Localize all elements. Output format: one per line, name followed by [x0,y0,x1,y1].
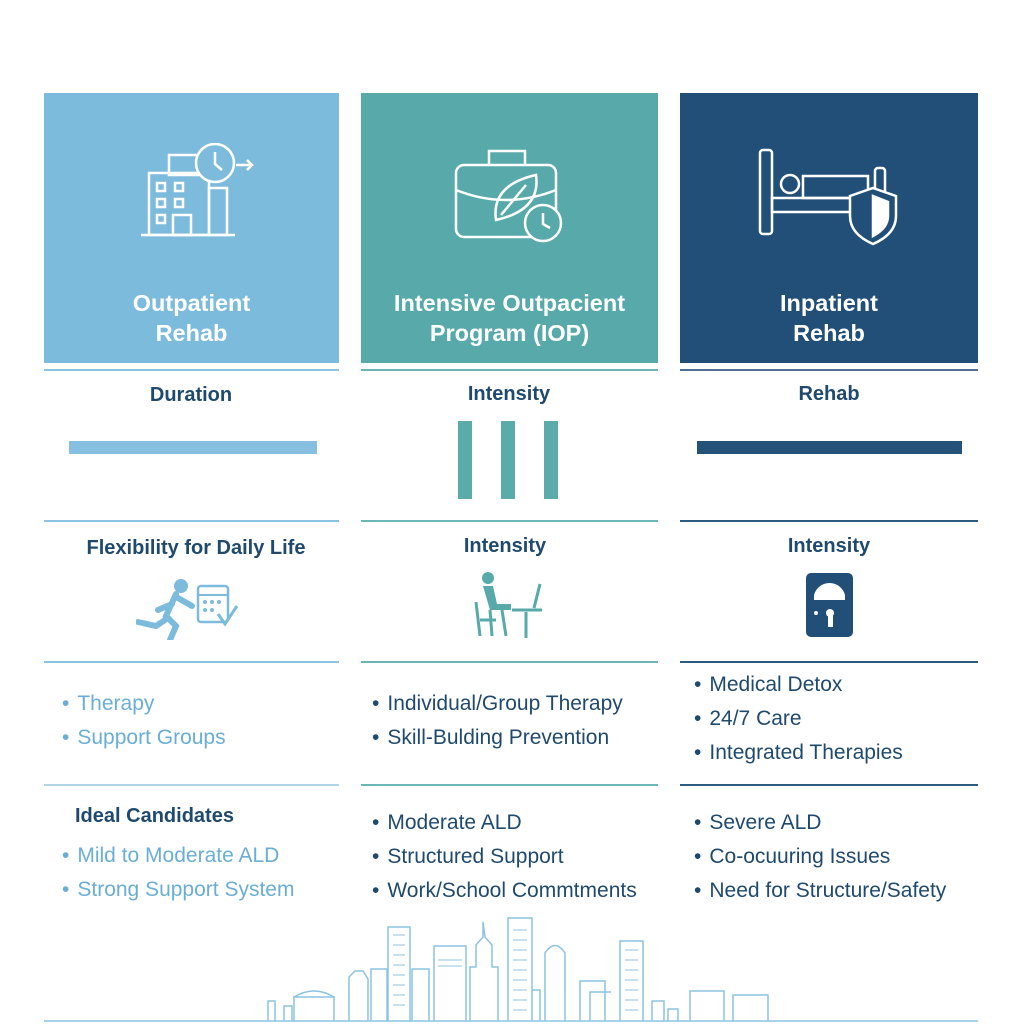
icon: locked door [806,573,853,637]
heading: intensity 2: Intensity [464,535,546,557]
icon: runner with calendar [136,579,238,640]
title: Rehab [156,320,227,346]
list: outpatient services: Therapy [77,692,154,715]
icon: briefcase with leaf and clock [454,150,562,242]
title: Rehab [793,320,865,346]
header: inpatient rehab [680,93,978,363]
heading: duration: Duration [150,384,232,406]
heading: intensity 3: Intensity [788,535,870,557]
bars: intensity [458,421,558,499]
list: inpatient candidates: Co-ocuuring Issues [709,845,890,868]
title [780,290,878,346]
header: outpatient rehab [44,93,339,363]
bar: duration [69,441,317,454]
list: IOP services: Skill-Bulding Prevention [387,726,609,749]
icon: person at desk [474,572,542,638]
list: outpatient services: Support Groups [77,726,226,749]
list: outpatient services [62,692,226,749]
list: outpatient candidates: Strong Support System [77,878,294,901]
bar: rehab [697,441,962,454]
list: inpatient services: Integrated Therapies [709,741,903,764]
list: inpatient candidates: Need for Structure/Safety [709,879,946,902]
list: outpatient candidates: Mild to Moderate ALD [77,844,279,867]
list: outpatient candidates [62,844,294,901]
list: inpatient candidates: Severe ALD [709,811,821,834]
heading: flexibility: Flexibility for Daily Life [87,537,305,559]
list: IOP services [372,692,623,749]
list: IOP candidates: Work/School Commtments [387,879,637,902]
list: IOP services: Individual/Group Therapy [387,692,623,715]
list: inpatient services [694,673,903,764]
title: Outpatient [133,290,250,316]
list: IOP candidates: Structured Support [387,845,564,868]
icon: bed with shield [758,148,898,246]
title: Inpatient [780,290,878,316]
title [133,290,250,346]
list: IOP candidates [372,811,637,902]
heading: ideal candidates: Ideal Candidates [75,805,234,827]
list: inpatient candidates [694,811,946,902]
heading: intensity: Intensity [468,383,550,405]
list: inpatient services: Medical Detox [709,673,842,696]
header: IOP [361,93,658,363]
title: Program (IOP) [430,320,589,346]
heading: rehab: Rehab [798,383,860,405]
list: inpatient services: 24/7 Care [709,707,802,730]
list: IOP candidates: Moderate ALD [387,811,522,834]
icon: building with clock [141,143,254,236]
title: Intensive Outpacient [394,290,625,316]
title [394,290,625,346]
skyline [44,917,978,1022]
